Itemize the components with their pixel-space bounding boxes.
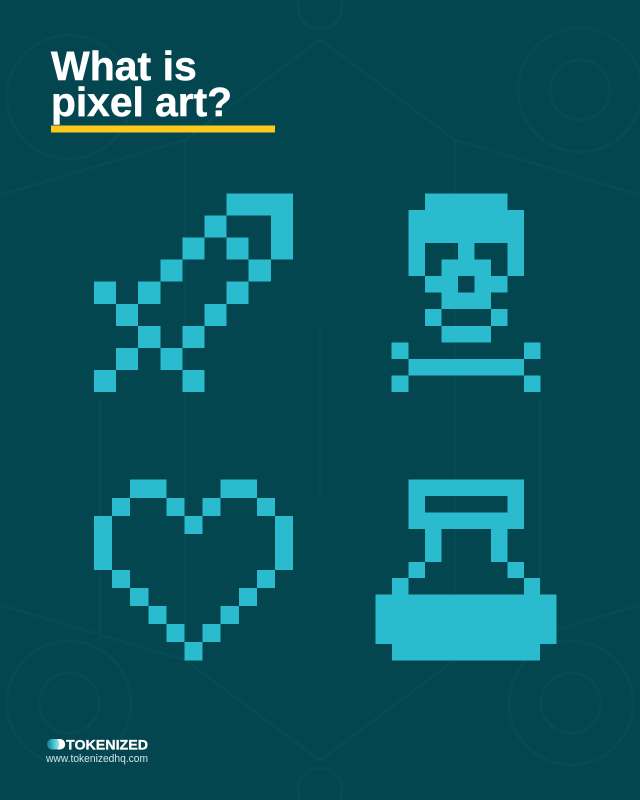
title [51, 43, 232, 125]
icon: logo mark [47, 739, 65, 750]
icon: pixel potion flask [376, 480, 557, 660]
icon: pixel sword [94, 193, 293, 392]
icon: pixel heart [94, 480, 293, 660]
icon: pixel skull and crossbones [392, 193, 541, 392]
website url: www.tokenizedhq.com [45, 753, 148, 765]
logo wordmark: TOKENIZED [66, 736, 148, 752]
title: What is [51, 43, 197, 89]
brand logo [47, 736, 148, 752]
title underline [51, 126, 275, 132]
title: pixel art? [51, 79, 232, 125]
